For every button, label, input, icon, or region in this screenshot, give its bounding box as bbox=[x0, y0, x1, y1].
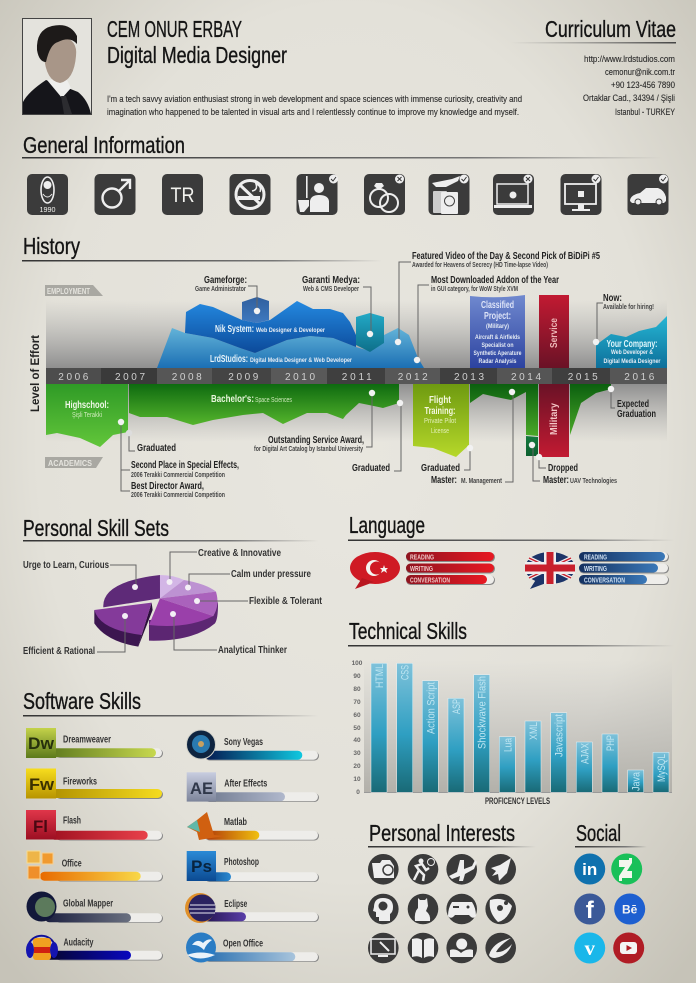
icon: brain question bbox=[368, 894, 399, 924]
area: flight training: Private Pilot bbox=[424, 418, 456, 425]
area: flight training: Flight bbox=[429, 395, 452, 406]
contact details bbox=[583, 54, 675, 118]
area: bachelor's bbox=[129, 384, 399, 425]
area: master management bbox=[470, 384, 538, 436]
area: LrdStudios: LrdStudios: bbox=[210, 354, 248, 365]
job title: Digital Media Designer bbox=[107, 42, 287, 68]
bar labels: XML bbox=[528, 722, 540, 740]
area: flight training: Training: bbox=[424, 406, 456, 417]
icon row: general information bbox=[27, 174, 668, 215]
skill: Sony Vegas bbox=[186, 730, 319, 760]
icon: idea book bbox=[446, 933, 477, 963]
panel: military: Military bbox=[549, 403, 560, 435]
panel: classified project bbox=[470, 295, 525, 368]
icon: airplane bbox=[446, 854, 477, 885]
panel: classified project: Aircraft & Airfields bbox=[475, 334, 520, 341]
icon: cat bbox=[408, 894, 438, 924]
area: highschool bbox=[46, 384, 128, 447]
timeline year band: 2007 bbox=[115, 372, 145, 383]
callout: featured video: Featured Video of the Day & Second Pick of BiDiPi #5 bbox=[412, 251, 600, 262]
icon: car bbox=[628, 174, 668, 215]
y axis labels: 10 bbox=[353, 776, 361, 783]
timeline year band: 2006 bbox=[58, 372, 89, 383]
x axis title: PROFICENCY LEVELS bbox=[485, 796, 550, 806]
callout: master UAV bbox=[529, 442, 617, 486]
skill: Fireworks: Fw bbox=[29, 775, 55, 794]
skill: Photoshop: Photoshop bbox=[224, 856, 259, 868]
callout: graduated highschool bbox=[126, 430, 176, 454]
timeline year band: 2015 bbox=[568, 372, 598, 383]
skill: Dreamweaver: Dreamweaver bbox=[63, 733, 111, 745]
icon: no smoking bbox=[230, 174, 270, 215]
skill: Matlab: Matlab bbox=[224, 816, 247, 828]
callout: Gameforge: Gameforge: bbox=[204, 275, 247, 286]
skill: Photoshop bbox=[187, 851, 319, 882]
icon: space shuttle bbox=[485, 854, 516, 885]
heading: History: History bbox=[23, 233, 80, 259]
contact details: Ortaklar Cad., 34394 / Şişli bbox=[583, 93, 675, 104]
icon: marital status bbox=[364, 174, 405, 215]
skill: Flash: Flash bbox=[63, 814, 81, 826]
bar labels: MySQL bbox=[656, 754, 668, 782]
skill bars bbox=[579, 552, 669, 585]
bio text: imagination who happened to be talented in visual arts and I relentlessly continue to improve my knowledge and myself. bbox=[107, 107, 519, 118]
icons: personal interests bbox=[368, 854, 516, 963]
callout: dropped bbox=[536, 454, 578, 474]
contact details: Istanbul - TURKEY bbox=[615, 107, 675, 118]
bar labels: PHP bbox=[605, 735, 617, 751]
panel: classified project: Radar Analysis bbox=[478, 358, 517, 365]
callout: now available: Available for hiring! bbox=[603, 304, 654, 311]
icon: Facebook: f bbox=[586, 897, 595, 924]
callout: master UAV: Master: bbox=[543, 475, 569, 486]
icon: Vimeo: v bbox=[584, 936, 595, 960]
heading: Social: Social bbox=[576, 820, 621, 846]
y axis labels: 40 bbox=[353, 737, 361, 744]
callout: awards 2006: Second Place in Special Effects, bbox=[131, 460, 239, 471]
callout: awards 2006 bbox=[118, 419, 239, 499]
skill: Dreamweaver: Dw bbox=[28, 734, 55, 753]
timeline year band: 2011 bbox=[342, 372, 372, 383]
skill: Eclipse bbox=[185, 893, 319, 923]
icon: galaxy bbox=[485, 933, 516, 963]
callout: most downloaded addon bbox=[414, 275, 559, 363]
timeline year band: 2014 bbox=[511, 372, 541, 383]
y axis labels: 70 bbox=[353, 699, 361, 706]
y axis labels bbox=[352, 660, 363, 796]
grey backdrop above and below band bbox=[46, 300, 667, 442]
area: expected graduation bbox=[570, 384, 611, 435]
bar labels: Action Script bbox=[425, 682, 437, 734]
icon: travel passport bbox=[428, 174, 470, 215]
area: Garanti Medya bbox=[356, 313, 384, 352]
pie chart: personal skills bbox=[23, 547, 322, 657]
area: your company bbox=[596, 316, 667, 368]
tag: academics bbox=[45, 457, 103, 468]
label: analytical: Analytical Thinker bbox=[218, 644, 287, 656]
skill bars: READING bbox=[410, 554, 434, 562]
skill: Open Office: Open Office bbox=[223, 937, 263, 949]
callout: awards 2006: 2006 Terakki Commercial Competition bbox=[131, 472, 225, 479]
callout: master UAV: UAV Technologies bbox=[570, 478, 617, 485]
skill: After Effects bbox=[187, 772, 319, 802]
panel: military bbox=[539, 384, 569, 457]
skill: Office: Office bbox=[62, 858, 82, 870]
callout: most downloaded addon: Most Downloaded Addon of the Year bbox=[431, 275, 559, 286]
icon: UK flag bubble bbox=[525, 552, 575, 589]
timeline year band: 2012 bbox=[398, 372, 428, 383]
bar labels bbox=[374, 664, 668, 791]
label: calm: Calm under pressure bbox=[231, 568, 311, 580]
icon: Turkish flag bubble bbox=[350, 552, 400, 589]
callout: most downloaded addon: in GUI category, for WoW Style XVM bbox=[431, 286, 518, 293]
area: highschool: Highschool: bbox=[65, 400, 109, 411]
callout: featured video bbox=[395, 251, 600, 345]
panel: service: Service bbox=[549, 318, 560, 348]
y axis labels: 0 bbox=[356, 789, 360, 796]
area: flight training bbox=[413, 384, 469, 457]
area: your company: Digital Media Designer bbox=[604, 358, 661, 365]
icon: LinkedIn: in bbox=[582, 860, 597, 879]
skill: Open Office bbox=[186, 932, 319, 962]
callout: outstanding service award bbox=[254, 390, 375, 453]
history timeline chart bbox=[28, 251, 667, 499]
timeline year band: 2008 bbox=[172, 372, 202, 383]
panel: classified project: Project: bbox=[484, 311, 511, 322]
bar labels: ASP bbox=[451, 699, 463, 714]
skill: Eclipse: Eclipse bbox=[224, 898, 247, 910]
panel: service bbox=[539, 295, 569, 368]
skill bars: CONVERSATION bbox=[584, 578, 625, 584]
callout: graduated flight bbox=[421, 445, 473, 474]
y axis labels: 50 bbox=[353, 725, 361, 732]
label: creative: Creative & Innovative bbox=[198, 547, 281, 559]
icon: YouTube bbox=[613, 932, 644, 964]
icon: birth year 1990 bbox=[27, 174, 68, 215]
heading: Personal Interests: Personal Interests bbox=[369, 820, 515, 846]
area: flight training: License bbox=[431, 428, 449, 435]
skill: Office bbox=[27, 851, 163, 882]
heading: Technical Skills: Technical Skills bbox=[349, 618, 467, 644]
skill: Audacity: Audacity bbox=[64, 937, 94, 949]
icons: social networks bbox=[574, 854, 645, 964]
tag: academics: ACADEMICS bbox=[48, 459, 93, 468]
skill: Fireworks: Fireworks bbox=[63, 775, 97, 787]
heading: General Information: General Information bbox=[23, 132, 185, 158]
callout: awards 2006: Best Director Award, bbox=[131, 481, 204, 492]
bar labels: AJAX bbox=[579, 742, 591, 764]
timeline year band: 2016 bbox=[624, 372, 655, 383]
timeline year band: 2010 bbox=[285, 372, 315, 383]
callout: graduated bachelor bbox=[352, 400, 403, 474]
timeline year band bbox=[46, 368, 667, 384]
y axis labels: 60 bbox=[353, 712, 361, 719]
icon: nationality TR: TR bbox=[170, 184, 194, 207]
panel: software skills bbox=[26, 728, 319, 962]
area: your company: Web Developer & bbox=[611, 349, 653, 356]
skill: Fireworks bbox=[26, 768, 163, 799]
callout: Gameforge: Game Administrator bbox=[195, 286, 246, 293]
panel: English language bbox=[525, 552, 669, 589]
icon: nationality TR bbox=[162, 174, 203, 215]
area: your company: Your Company: bbox=[606, 339, 658, 350]
y axis labels: 80 bbox=[353, 686, 361, 693]
icon: planet bbox=[485, 894, 516, 924]
callout: outstanding service award: for Digital Art Catalog by Istanbul University bbox=[254, 446, 363, 453]
contact details: cemonur@nik.com.tr bbox=[605, 67, 675, 78]
heading: Software Skills: Software Skills bbox=[23, 688, 141, 714]
icon: windows desktop bbox=[560, 174, 602, 215]
y axis labels: 30 bbox=[353, 750, 361, 757]
timeline year band: 2013 bbox=[454, 372, 484, 383]
area: highschool: Şişli Terakki bbox=[72, 412, 102, 419]
bar labels: Lua bbox=[502, 737, 514, 752]
icon: apple laptop bbox=[493, 174, 534, 215]
timeline year band: 2009 bbox=[228, 372, 259, 383]
icon: tennis bbox=[408, 854, 438, 885]
callout: awards 2006: 2006 Terakki Commercial Competition bbox=[131, 492, 225, 499]
bar labels: HTML bbox=[374, 664, 386, 688]
header: portrait photo bbox=[22, 18, 92, 114]
bar labels: Java bbox=[631, 771, 643, 791]
icon: DeviantArt bbox=[611, 854, 642, 884]
callout: outstanding service award: Outstanding Service Award, bbox=[268, 435, 364, 446]
callout: Garanti Medya bbox=[302, 275, 373, 337]
area: LrdStudios: Digital Media Designer & Web Developer bbox=[250, 357, 352, 364]
callout: master management: M. Management bbox=[461, 478, 503, 485]
y axis labels: 90 bbox=[353, 673, 361, 680]
panel: Turkish language bbox=[350, 552, 495, 589]
area: Nik System bbox=[185, 301, 356, 353]
skill: After Effects: AE bbox=[190, 779, 213, 798]
skill: Global Mapper bbox=[26, 892, 163, 923]
callout: graduated highschool: Graduated bbox=[137, 443, 176, 454]
icon: birth year 1990: 1990 bbox=[40, 205, 56, 214]
callout: dropped: Dropped bbox=[548, 463, 578, 474]
skill: Flash: Fl bbox=[33, 817, 48, 836]
bar labels: Javascript bbox=[554, 714, 566, 757]
skill bars: WRITING bbox=[584, 566, 607, 573]
callout: master management bbox=[431, 389, 515, 486]
callout: featured video: Awarded for Heavens of Secrecy (HD Time-lapse Video) bbox=[412, 262, 548, 269]
bio text bbox=[107, 94, 522, 118]
area: master UAV bbox=[526, 436, 538, 456]
skill bars: CONVERSATION bbox=[410, 578, 450, 584]
bio text: I'm a tech savvy aviation enthusiast strong in web development and space sciences with immense curiosity, creativity and bbox=[107, 94, 522, 105]
area: bachelor's: Bachelor's: bbox=[211, 394, 254, 405]
y axis labels: 100 bbox=[352, 660, 363, 667]
area: Nik System: Web Designer & Developer bbox=[256, 327, 325, 334]
label: urge to learn: Urge to Learn, Curious bbox=[23, 559, 109, 571]
name: CEM ONUR ERBAY bbox=[107, 16, 242, 42]
callout: Gameforge bbox=[195, 275, 260, 314]
panel: classified project: (Military) bbox=[486, 323, 509, 330]
callout: expected graduation bbox=[608, 386, 656, 420]
y axis labels: 20 bbox=[353, 763, 361, 770]
label: efficient: Efficient & Rational bbox=[23, 645, 95, 657]
callout: Garanti Medya: Garanti Medya: bbox=[302, 275, 360, 286]
icon: gamepad bbox=[446, 894, 477, 924]
contact details: +90 123-456 7890 bbox=[611, 80, 675, 91]
area: Nik System: Nik System: bbox=[215, 324, 254, 335]
callout: graduated bachelor: Graduated bbox=[352, 463, 390, 474]
skill: Photoshop: Ps bbox=[191, 857, 212, 876]
callout: graduated flight: Graduated bbox=[421, 463, 460, 474]
label: flexible: Flexible & Tolerant bbox=[249, 595, 322, 607]
heading: Personal Skill Sets: Personal Skill Sets bbox=[23, 515, 169, 541]
icon: male bbox=[94, 174, 136, 215]
area: Gameforge bbox=[242, 297, 269, 323]
bar labels: Shockwave Flash bbox=[477, 676, 489, 749]
skill bars: READING bbox=[584, 554, 607, 562]
skill: Sony Vegas: Sony Vegas bbox=[224, 736, 263, 748]
area: bachelor's: Space Sciences bbox=[255, 397, 292, 404]
bars bbox=[371, 663, 669, 792]
callout: now available: Now: bbox=[603, 293, 622, 304]
panel: classified project: Synthetic Aperature bbox=[474, 350, 522, 357]
icon: Behance: Bē bbox=[622, 902, 638, 916]
icon: camera bbox=[368, 854, 399, 885]
icon: monitor tools bbox=[368, 933, 399, 963]
icon: military service bbox=[296, 174, 338, 215]
skill: Dreamweaver bbox=[26, 728, 163, 758]
skill: Matlab bbox=[187, 812, 319, 840]
skill bars: WRITING bbox=[410, 566, 433, 573]
contact details: http://www.lrdstudios.com bbox=[584, 54, 675, 65]
heading: Language: Language bbox=[349, 512, 425, 538]
tag: employment: EMPLOYMENT bbox=[47, 287, 90, 296]
skill: Flash bbox=[26, 810, 163, 840]
callout: master management: Master: bbox=[431, 475, 457, 486]
callout: expected graduation: Expected bbox=[617, 399, 649, 410]
skill: Global Mapper: Global Mapper bbox=[63, 897, 113, 909]
callout: now available bbox=[593, 293, 654, 345]
callout: expected graduation: Graduation bbox=[617, 409, 656, 420]
area: LrdStudios bbox=[157, 328, 424, 368]
icon: book bbox=[408, 933, 438, 963]
skill: Audacity bbox=[26, 936, 163, 960]
skill: After Effects: After Effects bbox=[224, 778, 267, 790]
panel: classified project: Specialist on bbox=[482, 342, 514, 349]
skill bars bbox=[406, 552, 495, 585]
panel: classified project: Classified bbox=[481, 300, 514, 311]
bar labels: CSS bbox=[400, 665, 412, 680]
axis label: level of effort: Level of Effort bbox=[28, 335, 42, 412]
bar chart: technical skills bbox=[352, 660, 672, 806]
callout: Garanti Medya: Web & CMS Developer bbox=[303, 286, 359, 293]
